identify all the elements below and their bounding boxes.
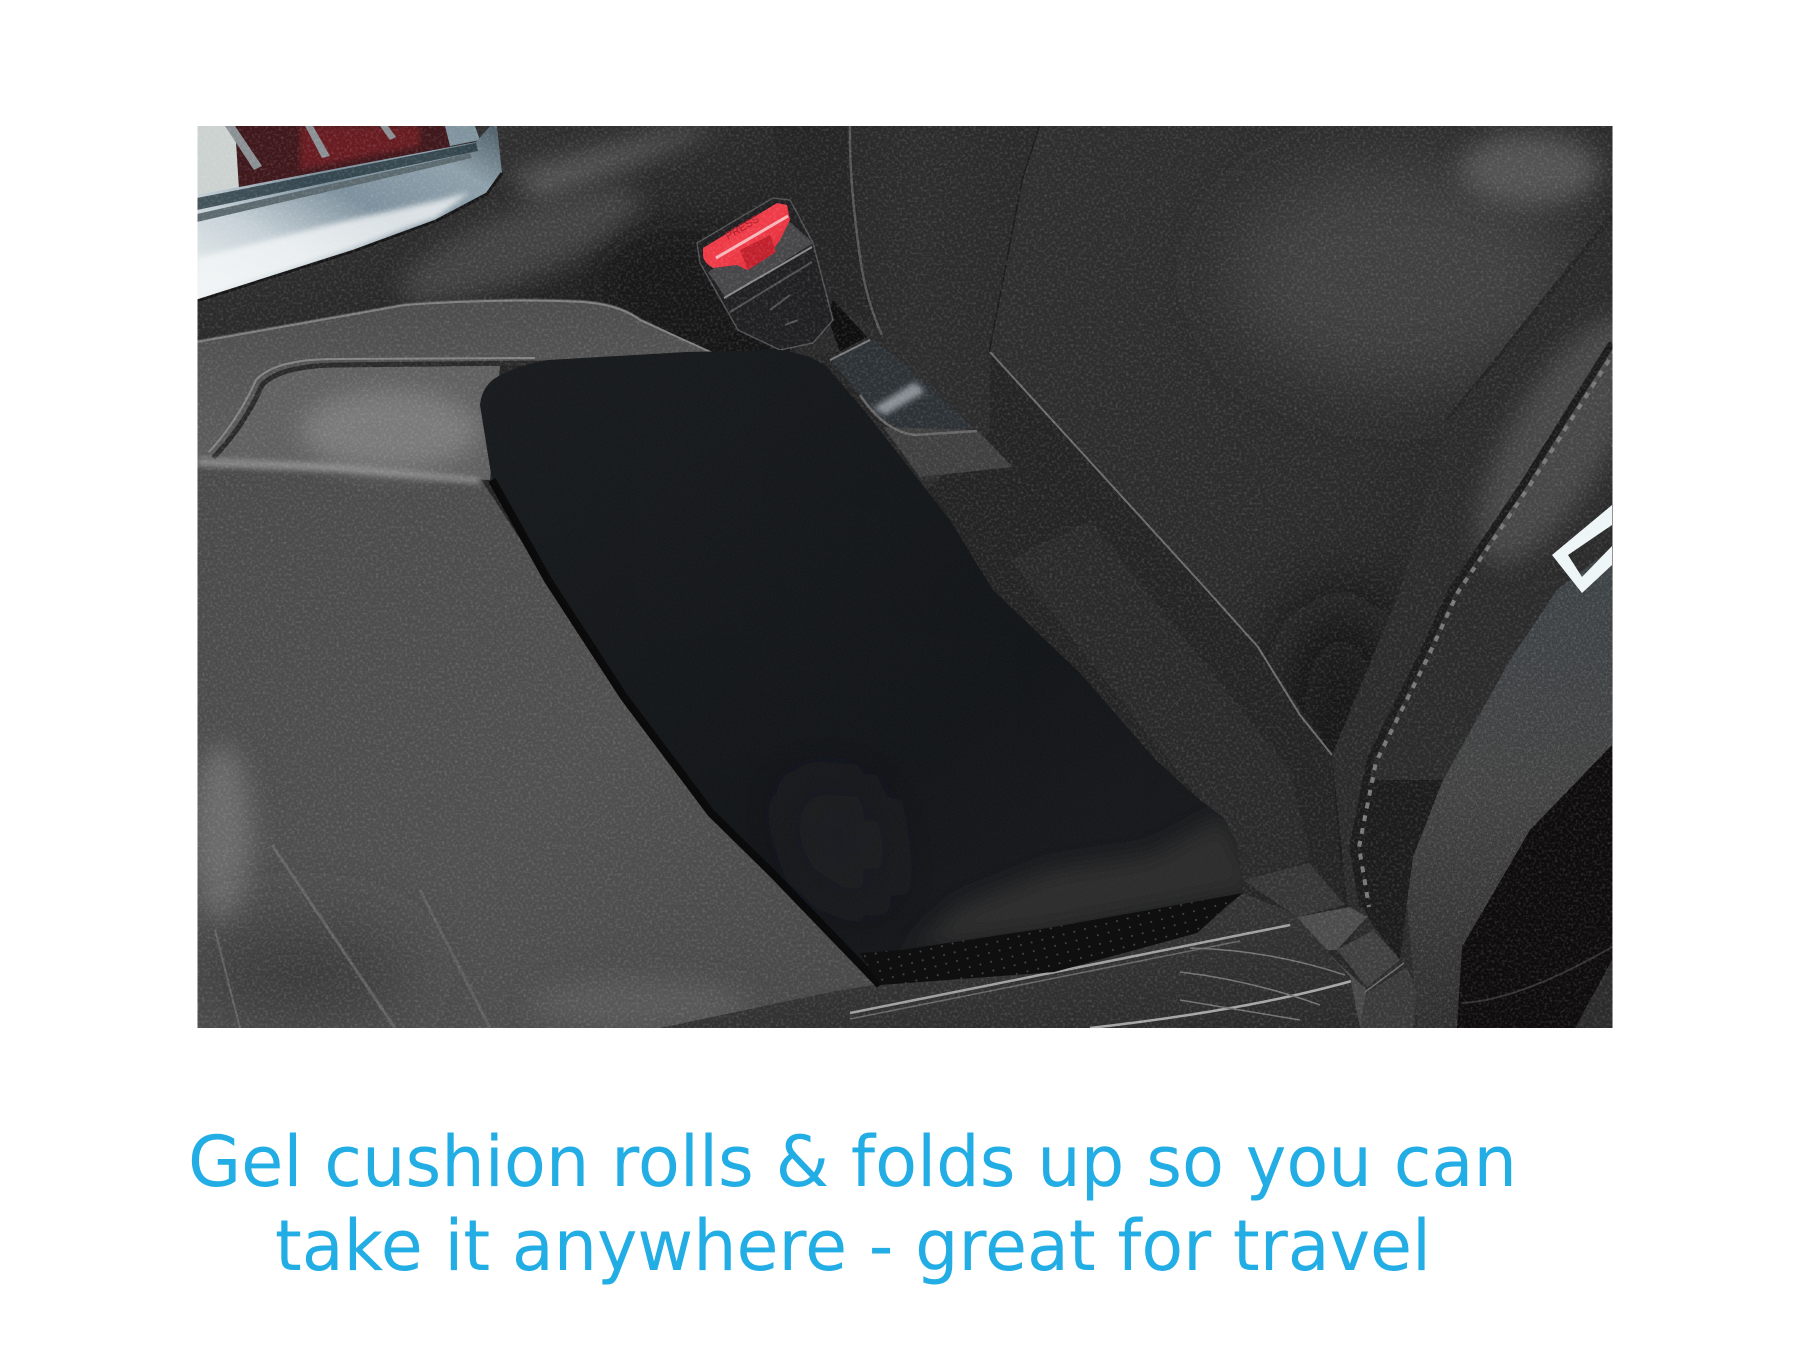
white belt guide loop	[1552, 505, 1612, 593]
caption line 2: take it anywhere - great for travel	[275, 1205, 1431, 1287]
seat side bolster	[197, 299, 715, 484]
photo base	[481, 126, 1612, 1028]
seatbelt webbing	[1400, 540, 1612, 1028]
seatback centre panel	[990, 126, 1612, 880]
leather grain overlay	[198, 126, 1612, 1028]
seatbelt buckle	[697, 198, 840, 358]
photo: gel cushion on car seat	[190, 126, 1673, 1031]
seam stitching on bolster	[1353, 343, 1616, 907]
seatbelt buckle: PRESS	[723, 213, 762, 243]
black gap beside seat	[1457, 745, 1612, 1028]
strip between seat back and base	[928, 352, 1340, 870]
caption	[188, 1121, 1517, 1287]
perforated lower strip	[860, 893, 1243, 985]
chrome door trim	[197, 126, 502, 301]
seatback side wing	[830, 126, 1040, 353]
red release button	[703, 203, 790, 270]
door panel	[390, 126, 790, 352]
seat base leather	[190, 455, 890, 1031]
caption line 1: Gel cushion rolls & folds up so you can	[188, 1121, 1517, 1203]
gel cushion	[480, 350, 1260, 990]
cushion left side shadow edge	[492, 480, 880, 985]
seat front bolster	[660, 893, 1360, 1028]
cushion soft highlights	[702, 390, 1242, 949]
plastic seat-rail cover	[830, 340, 1013, 477]
seatback outer bolster	[1332, 251, 1612, 960]
window wood trim	[198, 126, 480, 195]
seat hinge trim	[1243, 863, 1417, 1028]
